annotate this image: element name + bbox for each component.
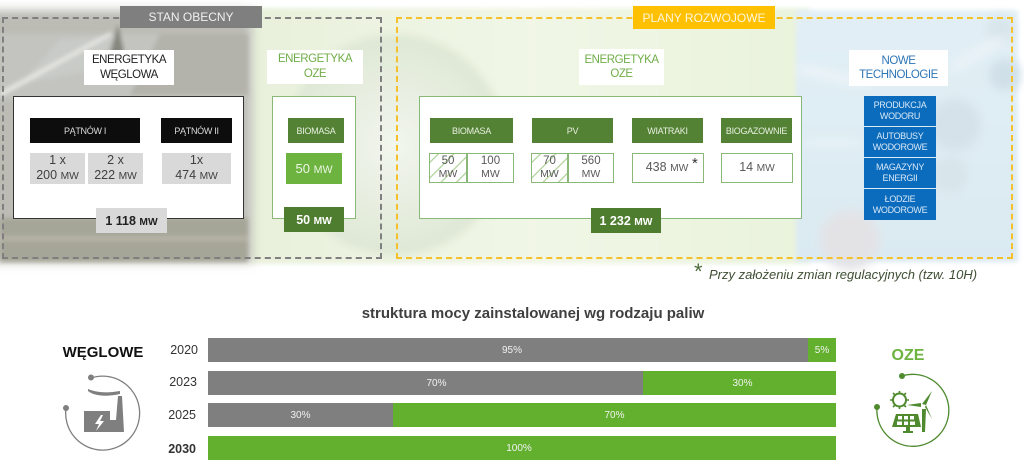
footnote asterisk: * (694, 259, 703, 284)
header: biogazownie (721, 118, 792, 143)
footnote text: Przy założeniu zmian regulacyjnych (tzw. 10H) (709, 267, 977, 282)
panel: plany rozwojowe (396, 6, 1013, 259)
segment: 5%: 5% (815, 344, 829, 356)
item: łodzie wodorowe (864, 189, 936, 220)
year: 2030: 2030 (168, 442, 196, 456)
label: plany rozwojowe (633, 6, 775, 29)
total: 1 118 MW: 1 118 MW (105, 214, 158, 228)
value: 50 MW: 50 MW (295, 161, 332, 176)
value: 438 MW: 438 MW (646, 160, 688, 174)
header: Pątnów II: PĄTNÓW II (174, 126, 219, 136)
stacked bar chart (168, 338, 836, 460)
heading: energetyka węglowa: ENERGETYKA (92, 54, 166, 66)
value: 70 MW hatched: MW (540, 168, 559, 180)
icon: coal plant (63, 374, 140, 451)
year: 2020: 2020 (170, 343, 198, 357)
value: 1x 474 MW: 1x (190, 153, 203, 167)
segment: 95%: 95% (502, 344, 522, 356)
item: magazyny energii (864, 158, 936, 188)
value: 2 x 222 MW (88, 153, 143, 184)
list: nowe technologie (864, 96, 936, 220)
value: 560 MW: MW (582, 168, 600, 180)
value: 438 MW (632, 153, 704, 183)
segment: 70%: 70% (604, 410, 624, 420)
item: autobusy wodorowe: AUTOBUSY (877, 131, 923, 141)
total: 1 118 MW (96, 208, 167, 233)
heading: energetyka OZE (plany): OZE (610, 68, 633, 80)
dashed frame: stan obecny (2, 17, 382, 259)
value: 50 MW (286, 153, 342, 184)
item: produkcja wodoru: WODORU (880, 111, 920, 121)
value: 560 MW (568, 153, 614, 183)
header: PV: PV (567, 126, 578, 136)
panel: stan obecny (2, 6, 382, 259)
value: 14 MW (721, 153, 793, 183)
heading: energetyka OZE (obecnie) (267, 50, 363, 84)
header: PV (532, 118, 613, 143)
value: 2 x 222 MW: 222 MW (94, 168, 137, 182)
segment: 70% (393, 403, 836, 427)
value: 1 x 200 MW: 200 MW (36, 168, 79, 182)
header: Pątnów I (30, 118, 140, 143)
segment: 5% (808, 338, 836, 362)
footnote (694, 259, 977, 284)
header: wiatraki: WIATRAKI (647, 126, 688, 136)
item: łodzie wodorowe: ŁODZIE (885, 194, 915, 204)
value: 560 MW: 560 (581, 155, 601, 167)
item: produkcja wodoru: PRODUKCJA (874, 100, 926, 110)
total: 50 MW (284, 207, 344, 232)
heading: energetyka OZE (obecnie): OZE (304, 68, 326, 80)
segment: 70%: 70% (426, 378, 446, 388)
icon: renewables (874, 373, 950, 447)
value: 100 MW: 100 (481, 155, 500, 167)
header: biomasa: BIOMASA (452, 126, 491, 136)
segment: 70% (208, 371, 643, 395)
year: 2025: 2025 (168, 408, 196, 422)
item: magazyny energii: MAGAZYNY (876, 162, 924, 172)
bar 2025 (208, 403, 836, 427)
heading: energetyka OZE (plany) (579, 49, 664, 85)
year: 2023: 2023 (169, 375, 197, 389)
label: plany rozwojowe: PLANY ROZWOJOWE (642, 10, 766, 24)
label: stan obecny (120, 6, 262, 28)
heading: energetyka węglowa (84, 50, 174, 85)
item: łodzie wodorowe: WODOROWE (873, 204, 927, 214)
item: produkcja wodoru (864, 96, 936, 126)
header: biogazownie: BIOGAZOWNIE (726, 126, 787, 136)
item: magazyny energii: ENERGII (883, 173, 917, 183)
value: 14 MW: 14 MW (739, 160, 775, 174)
value: 50 MW hatched: MW (439, 168, 457, 180)
bar 2023 (208, 371, 836, 395)
bar 2030 (208, 436, 836, 460)
value: 50 MW hatched: 50 (442, 155, 454, 167)
total: 50 MW: 50 MW (296, 212, 332, 226)
bar 2030: 100% (506, 442, 532, 454)
label: węglowe: WĘGLOWE (63, 344, 143, 361)
label: stan obecny: STAN OBECNY (148, 10, 234, 24)
value: 50 MW hatched (429, 153, 467, 183)
segment: 30% (208, 403, 393, 427)
bar 2020 (208, 338, 836, 362)
value: 1x 474 MW: 474 MW (175, 168, 218, 182)
segment: 30%: 30% (732, 378, 752, 388)
value: 438 MW: * (692, 155, 698, 172)
heading: energetyka OZE (obecnie): ENERGETYKA (278, 53, 352, 65)
segment: 95% (208, 338, 808, 362)
total: 1 232 MW: 1 232 MW (600, 214, 652, 228)
heading: energetyka węglowa: WĘGLOWA (100, 68, 158, 80)
heading: energetyka OZE (plany): ENERGETYKA (584, 54, 659, 66)
value: 1 x 200 MW (30, 153, 85, 184)
total: 1 232 MW (591, 208, 661, 233)
header: biomasa (288, 118, 344, 143)
heading: nowe technologie (849, 50, 948, 86)
panel: OZE plany (419, 96, 802, 219)
header: Pątnów I: PĄTNÓW I (64, 126, 106, 136)
header: biomasa (430, 118, 513, 143)
segment: 30%: 30% (290, 410, 310, 420)
header: wiatraki (632, 118, 703, 143)
heading: nowe technologie: TECHNOLOGIE (859, 69, 938, 81)
value: 100 MW: MW (481, 168, 500, 180)
dashed frame: plany rozwojowe (396, 17, 1013, 259)
panel: elektrownie węglowe (13, 96, 244, 219)
header: Pątnów II (161, 118, 232, 143)
value: 70 MW hatched: 70 (543, 155, 556, 167)
label: OZE: OZE (892, 347, 924, 364)
value: 100 MW (467, 153, 514, 183)
heading: nowe technologie: NOWE (882, 55, 915, 67)
value: 1 x 200 MW: 1 x (49, 153, 66, 167)
value: 2 x 222 MW: 2 x (107, 153, 124, 167)
chart title: struktura mocy zainstalowanej wg rodzaju paliw (362, 305, 704, 322)
segment: 30% (643, 371, 836, 395)
item: autobusy wodorowe (864, 127, 936, 157)
panel: OZE obecnie (272, 96, 356, 219)
value: 70 MW hatched (531, 153, 568, 183)
header: biomasa: BIOMASA (297, 126, 335, 136)
item: autobusy wodorowe: WODOROWE (873, 142, 927, 152)
value: 1x 474 MW (162, 153, 231, 184)
